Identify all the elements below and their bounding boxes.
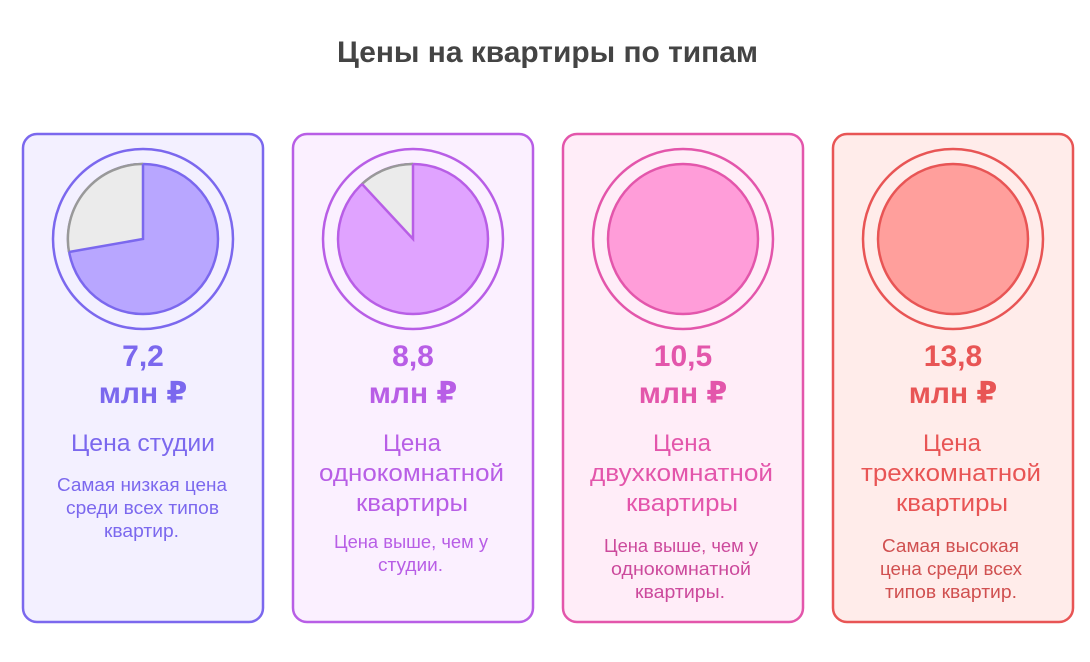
- description: three-room: цена среди всех: [880, 559, 1022, 579]
- description: three-room: Самая высокая: [882, 536, 1019, 556]
- price: studio: млн ₽: [99, 377, 187, 410]
- label: two-room: квартиры: [626, 490, 738, 517]
- description: studio: квартир.: [104, 521, 179, 541]
- price: one-room: [369, 340, 457, 410]
- price: two-room: [639, 340, 727, 410]
- price: three-room: 13,8: [924, 340, 982, 373]
- label: two-room: [590, 430, 773, 517]
- label: studio: Цена студии: [71, 430, 215, 457]
- price: studio: [99, 340, 187, 410]
- description: studio: Самая низкая цена: [57, 475, 228, 495]
- description: one-room: Цена выше, чем у: [334, 532, 488, 552]
- description: one-room: студии.: [378, 555, 443, 575]
- description: studio: [57, 475, 228, 541]
- panel: two-room: [563, 134, 803, 622]
- description: three-room: типов квартир.: [885, 582, 1017, 602]
- icon: two-room full circle: [593, 149, 773, 329]
- label: two-room: двухкомнатной: [590, 460, 773, 487]
- label: two-room: Цена: [653, 430, 712, 457]
- panel: three-room: [833, 134, 1073, 622]
- icon: one-room pie chart: [323, 149, 503, 329]
- panel: studio: [23, 134, 263, 622]
- panel: one-room: [293, 134, 533, 622]
- description: two-room: однокомнатной: [611, 559, 751, 579]
- title: Цены на квартиры по типам: [337, 36, 758, 69]
- label: one-room: [319, 430, 504, 517]
- label: three-room: трехкомнатной: [861, 460, 1041, 487]
- price: three-room: [909, 340, 997, 410]
- description: one-room: [334, 532, 488, 575]
- description: three-room: [880, 536, 1022, 602]
- price: two-room: млн ₽: [639, 377, 727, 410]
- description: two-room: Цена выше, чем у: [604, 536, 758, 556]
- description: two-room: квартиры.: [635, 582, 725, 602]
- label: one-room: однокомнатной: [319, 460, 504, 487]
- label: one-room: Цена: [383, 430, 442, 457]
- description: studio: среди всех типов: [66, 498, 219, 518]
- price: one-room: 8,8: [392, 340, 434, 373]
- icon: three-room full circle: [863, 149, 1043, 329]
- price: two-room: 10,5: [654, 340, 712, 373]
- label: three-room: Цена: [923, 430, 982, 457]
- label: one-room: квартиры: [356, 490, 468, 517]
- description: two-room: [604, 536, 758, 602]
- label: three-room: квартиры: [896, 490, 1008, 517]
- price: studio: 7,2: [122, 340, 164, 373]
- price: one-room: млн ₽: [369, 377, 457, 410]
- price: three-room: млн ₽: [909, 377, 997, 410]
- label: three-room: [861, 430, 1041, 517]
- icon: studio pie chart: [53, 149, 233, 329]
